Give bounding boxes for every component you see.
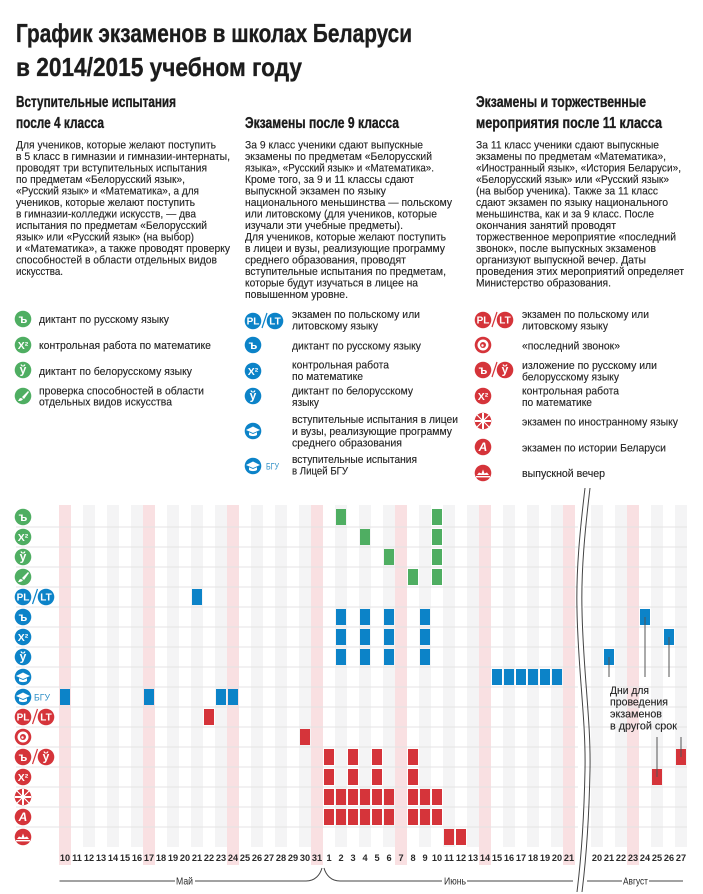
day labels: 23 [628, 853, 638, 863]
text block: after grade 11: (на выбор ученика). Также за 11 класс [476, 186, 659, 198]
text block: after grade 4: язык» или «Русский язык» (на выбор) [16, 232, 194, 244]
legend labels: проверка способностей в области [39, 386, 204, 398]
text block: after grade 4 [16, 140, 231, 278]
callout: make-up exam days: Дни для [610, 685, 649, 697]
day labels: 8 [410, 853, 416, 863]
day labels: 25 [652, 853, 662, 863]
icon: PL / LT: PL [247, 317, 259, 328]
day labels: 31 [312, 853, 322, 863]
legend labels [522, 309, 679, 480]
day labels: 17 [516, 853, 526, 863]
day labels: 19 [540, 853, 550, 863]
title [16, 18, 412, 82]
icon: graduation cap with BGU [245, 458, 280, 474]
legend labels: экзамен по польскому или [292, 309, 420, 321]
day labels: 12 [456, 853, 466, 863]
legend labels: диктант по русскому языку [292, 340, 422, 352]
icon: maths: X² [478, 391, 489, 403]
text block: after grade 11: сдают экзамен по языку национального [476, 197, 668, 209]
green bars [336, 509, 442, 585]
text block: after grade 9: выпускной экзамен по языку [245, 186, 387, 198]
legend labels: диктант по русскому языку [39, 314, 170, 326]
day labels: 27 [264, 853, 274, 863]
legend labels: по математике [522, 397, 592, 409]
text block: after grade 4: по предметам «Белорусский язык», [16, 174, 185, 186]
row icons: ў [43, 750, 50, 764]
legend: after grade 4 [15, 311, 211, 408]
text block: after grade 9: повышенном уровне. [245, 289, 348, 301]
text block: after grade 11: проведения этих мероприятий определяет [476, 266, 684, 278]
legend labels: и вузы, реализующие программу [292, 426, 453, 438]
title: График экзаменов в школах Беларуси [16, 18, 412, 48]
text block: after grade 11: «Белорусский язык» или «Русский язык» [476, 174, 669, 186]
text block: after grade 4: и «Математика», а также проводят проверку [16, 243, 231, 255]
text block: after grade 9: национального меньшинства — польскому [245, 197, 453, 209]
axis break lines [577, 488, 590, 892]
day labels [60, 853, 686, 863]
day labels: 24 [228, 853, 239, 863]
day labels: 15 [120, 853, 130, 863]
day labels: 21 [604, 853, 614, 863]
heading: after grade 4: Вступительные испытания [16, 94, 176, 111]
text block: after grade 11: торжественное мероприятие «последний [476, 232, 676, 244]
day labels: 14 [108, 853, 119, 863]
callout: make-up exam days: в другой срок [610, 720, 677, 732]
icon: Belarusian dictation: ў [250, 388, 257, 402]
icon: PL / LT: LT [269, 317, 281, 328]
text block: after grade 9: вступительные испытания по предметам, [245, 266, 446, 278]
text block: after grade 9: Кроме того, за 9 и 11 классы сдают [245, 174, 414, 186]
day labels: 15 [492, 853, 502, 863]
icon: maths [475, 388, 491, 404]
title: в 2014/2015 учебном году [16, 52, 302, 82]
legend labels [39, 314, 211, 408]
row icons: ъ [19, 610, 28, 624]
callout: make-up exam days: проведения [610, 696, 668, 708]
day labels: 1 [326, 853, 332, 863]
day labels: 20 [592, 853, 602, 863]
day labels: 18 [528, 853, 538, 863]
icon: Russian / Belarusian: ъ [479, 363, 488, 377]
icon: Russian / Belarusian [475, 362, 513, 378]
month axis: Май [176, 876, 193, 888]
legend labels: вступительные испытания в лицеи [292, 414, 458, 426]
text block: after grade 9: или литовскому (для учеников, которые [245, 208, 437, 220]
legend labels: литовскому языку [292, 320, 379, 332]
icon: prom [475, 465, 491, 481]
day labels: 9 [422, 853, 428, 863]
icon: flag [475, 413, 491, 429]
day labels: 26 [252, 853, 262, 863]
day labels: 4 [362, 853, 368, 863]
callout: make-up exam days [610, 685, 677, 732]
month axis: Июнь [444, 876, 466, 888]
text block: after grade 11: окончания занятий проводят [476, 220, 616, 232]
legend labels: выпускной вечер [522, 468, 605, 480]
day labels: 16 [504, 853, 514, 863]
text block: after grade 4: «Русский язык» и «Математика», а для [16, 186, 199, 198]
day labels: 13 [468, 853, 478, 863]
red bars [204, 709, 686, 845]
row icons: БГУ [34, 692, 51, 704]
day labels: 10 [432, 853, 442, 863]
text block: after grade 4: способностей в области отдельных видов [16, 254, 217, 266]
icon: bell [475, 337, 491, 353]
day labels: 20 [180, 853, 190, 863]
icon: graduation cap [245, 423, 261, 439]
legend labels: экзамен по истории Беларуси [522, 442, 666, 454]
icon: Russian dictation [15, 311, 31, 327]
day labels: 10 [60, 853, 70, 863]
icon: PL / LT [245, 313, 283, 329]
day labels: 16 [132, 853, 142, 863]
heading: after grade 4: после 4 класса [16, 115, 104, 132]
day labels: 20 [552, 853, 562, 863]
text block: after grade 11: меньшинства, как и за 9 класс. После [476, 208, 654, 220]
text block: after grade 4: в 5 класс в гимназии и гимназии-интернаты, [16, 151, 230, 163]
day labels: 22 [204, 853, 214, 863]
day labels: 29 [288, 853, 298, 863]
heading: after grade 11 [476, 94, 662, 132]
day labels: 11 [72, 853, 82, 863]
row icons: ў [20, 550, 27, 564]
icon: Russian / Belarusian: ў [502, 362, 509, 376]
text block: after grade 4: испытания по предметам «Белорусский [16, 220, 207, 232]
legend labels: экзамен по польскому или [522, 309, 649, 321]
panel: after grade 11 [475, 94, 684, 481]
heading: after grade 9: Экзамены после 9 класса [245, 115, 399, 132]
day labels: 26 [664, 853, 674, 863]
text block: after grade 9 [245, 140, 453, 301]
day labels: 13 [96, 853, 106, 863]
day labels: 17 [144, 853, 154, 863]
text block: after grade 11: Министерство образования. [476, 278, 611, 290]
row icons: LT [40, 713, 52, 724]
legend labels: среднего образования [292, 438, 402, 450]
text block: after grade 4: Для учеников, которые желают поступить [16, 140, 216, 152]
row icons: PL [17, 713, 29, 724]
icon: history: А [478, 440, 487, 454]
legend labels: литовскому языку [522, 320, 609, 332]
text block: after grade 4: искусства. [16, 266, 63, 278]
day labels: 25 [240, 853, 250, 863]
icon: graduation cap with BGU: БГУ [266, 462, 280, 472]
day labels: 27 [676, 853, 686, 863]
text block: after grade 11 [476, 140, 684, 290]
icon: PL / LT: PL [477, 316, 489, 327]
legend labels: в Лицей БГУ [292, 466, 348, 478]
legend: after grade 9 [245, 309, 458, 478]
legend labels: контрольная работа [292, 360, 389, 372]
day labels: 11 [444, 853, 454, 863]
panel: after grade 9 [245, 115, 458, 478]
icon: Russian dictation: ъ [19, 312, 28, 326]
heading: after grade 11: Экзамены и торжественные [476, 94, 646, 111]
legend labels: отдельных видов искусства [39, 396, 172, 408]
legend labels: экзамен по иностранному языку [522, 416, 679, 428]
icon: maths [245, 363, 261, 379]
legend labels: изложение по русскому или [522, 360, 657, 372]
legend labels: контрольная работа по математике [39, 340, 211, 352]
day labels: 22 [616, 853, 626, 863]
day labels: 21 [192, 853, 202, 863]
day labels: 3 [350, 853, 356, 863]
row icons: X² [18, 772, 29, 784]
row icons: LT [40, 593, 52, 604]
day labels: 28 [276, 853, 286, 863]
day labels: 6 [386, 853, 392, 863]
text block: after grade 9: в лицеи и вузы, реализующие программу [245, 243, 446, 255]
day labels: 5 [374, 853, 380, 863]
row icons [15, 509, 54, 845]
day labels: 23 [216, 853, 226, 863]
day labels: 24 [640, 853, 651, 863]
row icons: А [18, 810, 27, 824]
text block: after grade 9: среднего образования, проводят [245, 254, 406, 266]
blue bars [60, 589, 674, 705]
icon: PL / LT: LT [499, 316, 511, 327]
callout: make-up exam days: экзаменов [610, 708, 662, 720]
text block: after grade 9: экзамены по предметам «Белорусский [245, 151, 432, 163]
icon: maths [15, 337, 31, 353]
row icons: PL [17, 593, 29, 604]
row icons: ъ [19, 510, 28, 524]
legend labels: контрольная работа [522, 386, 619, 398]
legend labels: диктант по белорусскому [292, 386, 414, 398]
legend labels: белорусскому языку [522, 372, 620, 384]
legend labels: языку [292, 397, 320, 409]
legend labels: диктант по белорусскому языку [39, 366, 193, 378]
row icons: X² [18, 532, 29, 544]
day labels: 21 [564, 853, 574, 863]
day labels: 18 [156, 853, 166, 863]
text block: after grade 11: За 11 класс ученики сдают выпускные [476, 140, 659, 152]
text block: after grade 4: в гимназии-колледжи искусств, — два [16, 208, 196, 220]
text block: after grade 4: учеников, которые желают поступить [16, 197, 195, 209]
text block: after grade 4: проводят три вступительных испытания [16, 162, 207, 174]
heading: after grade 4 [16, 94, 176, 132]
text block: after grade 11: организуют выпускной вечер. Даты [476, 254, 646, 266]
icon: maths: X² [18, 340, 29, 352]
icon: Belarusian dictation [245, 388, 261, 404]
text block: after grade 9: языка», «Русский язык» и «Математика». [245, 162, 434, 174]
legend: after grade 11 [475, 309, 679, 481]
text block: after grade 11: экзамены по предметам «Математика», [476, 151, 666, 163]
day labels: 7 [398, 853, 404, 863]
panel: after grade 4 [15, 94, 231, 408]
icon: Russian dictation: ъ [249, 338, 258, 352]
icon: Russian dictation [245, 337, 261, 353]
month axis: Август [623, 876, 648, 888]
day labels: 19 [168, 853, 178, 863]
legend labels: по математике [292, 371, 363, 383]
text block: after grade 9: изучали эти учебные предметы). [245, 220, 403, 232]
icon: brush [15, 388, 31, 404]
month axis [60, 868, 683, 888]
text block: after grade 11: звонок», после выпускных экзаменов [476, 243, 656, 255]
legend labels [292, 309, 458, 478]
text block: after grade 11: «Иностранный язык», «История Беларуси», [476, 162, 681, 174]
icon: Belarusian dictation [15, 362, 31, 378]
icon: history [475, 439, 491, 455]
chart: exam calendar [15, 488, 687, 892]
text block: after grade 9: Для учеников, которые желают поступить [245, 232, 446, 244]
day labels: 30 [300, 853, 310, 863]
row icons: X² [18, 632, 29, 644]
row icons: ў [20, 650, 27, 664]
legend labels: вступительные испытания [292, 454, 417, 466]
icon: Belarusian dictation: ў [20, 362, 27, 376]
text block: after grade 9: За 9 класс ученики сдают выпускные [245, 140, 423, 152]
connector lines to callout [609, 617, 681, 777]
text block: after grade 9: которые будут изучаться в лицее на [245, 278, 418, 290]
legend labels: «последний звонок» [522, 340, 620, 352]
heading: after grade 11: мероприятия после 11 класса [476, 115, 662, 132]
icon: PL / LT [475, 312, 513, 328]
day labels: 2 [338, 853, 344, 863]
icon: maths: X² [248, 366, 259, 378]
day labels: 14 [480, 853, 491, 863]
day labels: 12 [84, 853, 94, 863]
row icons: ъ [19, 750, 28, 764]
